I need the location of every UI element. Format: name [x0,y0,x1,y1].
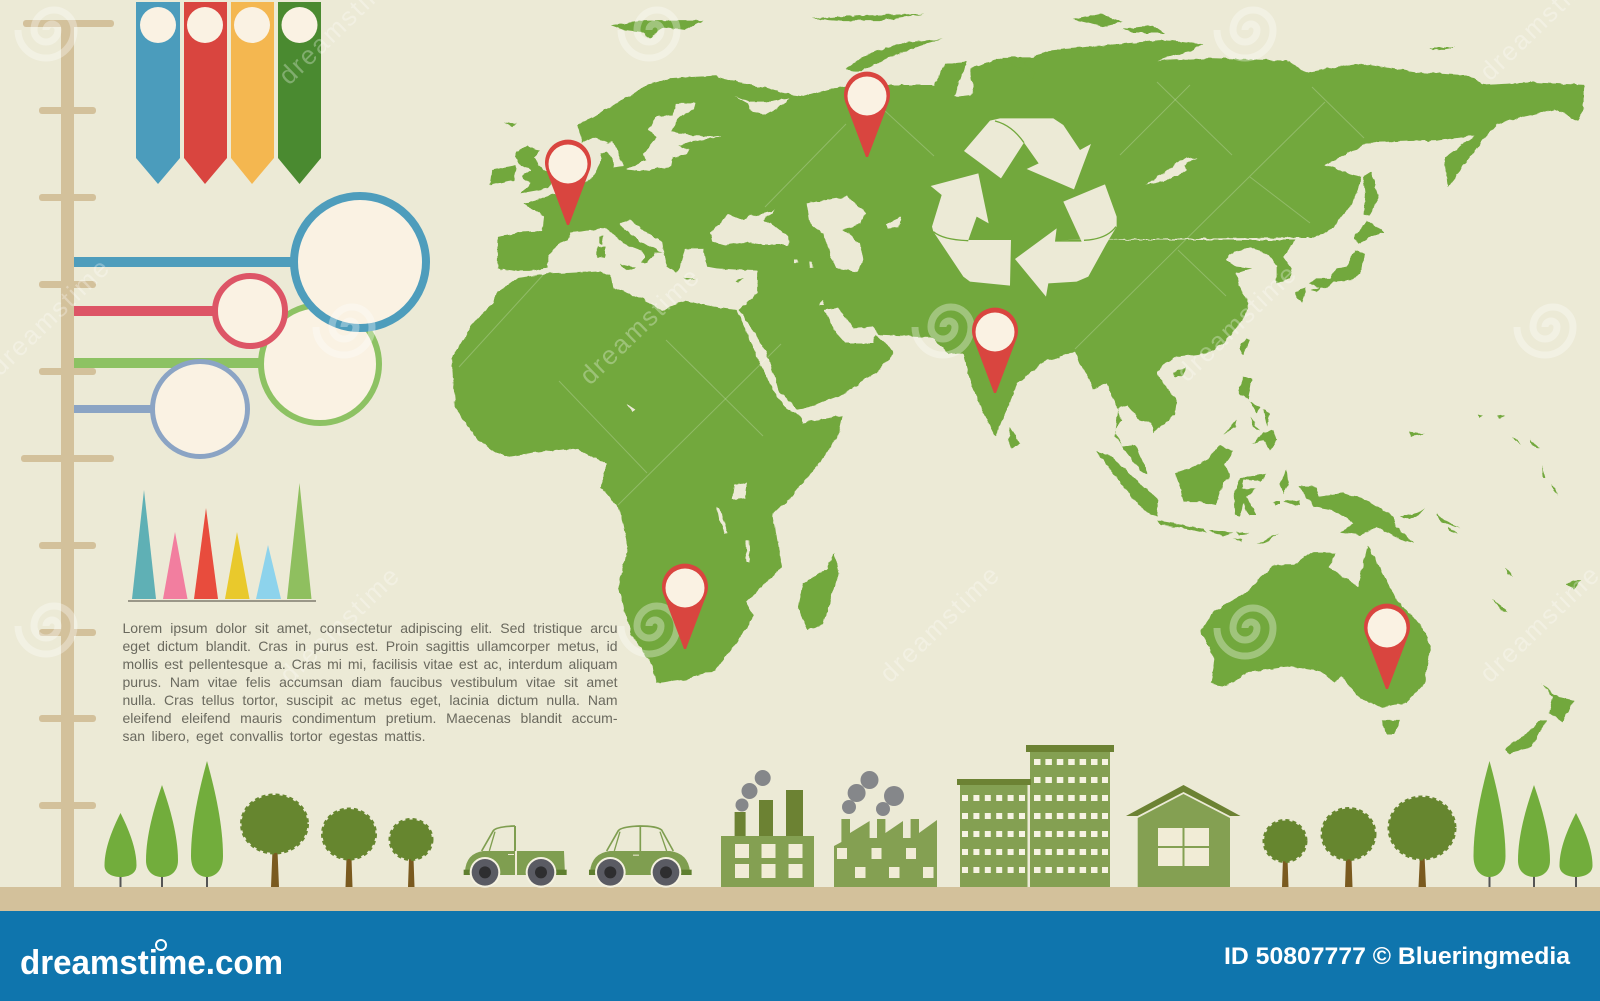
footer bar [0,911,1600,1001]
seas and lakes of west Eurasia [517,96,867,320]
paragraph text: Lorem ipsum dolor sit amet, consectetur adipiscing elit. Sed tristique arcu [122,620,618,636]
pin: Europe [545,140,591,225]
Pacific island dots [1409,415,1582,612]
icon: factory with three chimneys [721,770,814,887]
map pins [545,72,1410,689]
left tree row [104,761,432,887]
landmass: China, Korea and Indochina [1060,240,1295,473]
landmass: Africa [451,271,843,683]
pin: India [972,308,1018,393]
cypress trees right [1474,761,1592,887]
north-east islands [1073,14,1455,245]
paragraph text: mollis est pellentesque a. Cras mi mi, facilisis vitae est ac, interdum aliquam [122,656,618,672]
landmass: New Zealand [1505,684,1574,754]
icon: sedan car [589,826,692,888]
vehicles [464,826,692,888]
watermark: brand text [0,0,1600,689]
callout: green circle [74,305,379,423]
landmass: Madagascar [798,553,839,630]
arctic islands [610,14,943,71]
Mediterranean islands [597,237,745,317]
paragraph text: purus. Nam vitae felis accumsan diam faucibus vestibulum vitae sit amet [122,674,618,690]
paragraph text: eleifend eleifend mauris condimentum pretium. Maecenas blandit accum- [122,710,618,726]
land and seas [451,14,1584,754]
landmass: Sri Lanka [1008,427,1020,449]
footer logo: dreamstime.com [20,944,283,982]
landmass: Australia [1201,545,1431,708]
landmass: Tasmania [1381,720,1400,734]
footer credit: ID 50807777 © Blueringmedia [1224,943,1571,970]
watermark: brand text: dreamstime [1170,257,1303,387]
ribbon: red [184,2,227,184]
callout: periwinkle circle [74,362,248,456]
ribbon: green [278,2,321,184]
round trees left [242,795,432,887]
pin: southern Africa [662,564,708,649]
icon: recycle symbol [931,118,1117,297]
ribbon: yellow [231,2,274,184]
paragraph text: san libero, eget convallis tortor egestas mattis. [122,728,426,744]
landmass: Japan and south-east Asia islands [1097,250,1458,543]
ruler pole with tick marks [21,20,114,887]
callout: blue circle [74,196,426,328]
cypress trees left [104,761,223,887]
icon: office buildings [957,745,1114,887]
icon: house [1126,785,1240,887]
ribbon banners [136,2,321,184]
circle callouts on stems [74,196,426,456]
paragraph text: eget dictum blandit. Cras in purus est. Proin sagittis ullamcorper metus, id [122,638,618,654]
callout: red circle [74,276,285,346]
world map [451,14,1584,754]
pin: Russia [844,72,890,157]
icon: sawtooth factory [834,771,937,887]
African lakes [628,404,750,563]
ribbon: blue [136,2,180,184]
lake Baikal [1145,158,1197,185]
pin: Australia [1364,604,1410,689]
right tree row [1264,761,1592,887]
round trees right [1264,797,1455,887]
watermark: brand text: dreamstime [573,260,706,390]
seas: Gulf and Red Sea [825,216,901,349]
paragraph text [122,620,618,744]
watermark: thin diagonal lines [459,82,1364,505]
paragraph text: nulla. Cras tellus tortor, suscipit ac metus eget, lacinia dictum nulla. Nam [122,692,618,708]
watermark: spirals [18,10,1573,656]
ground strip [0,887,1600,911]
landmass: east Eurasia [1000,40,1584,427]
watermark: brand text: dreamstime [273,559,406,689]
watermark: brand text: dreamstime [873,558,1006,688]
landmass: west Eurasia [497,57,1040,436]
icon: pickup truck [464,826,567,888]
triangle chart [128,483,316,602]
landmass: Britain and Ireland [490,123,557,193]
